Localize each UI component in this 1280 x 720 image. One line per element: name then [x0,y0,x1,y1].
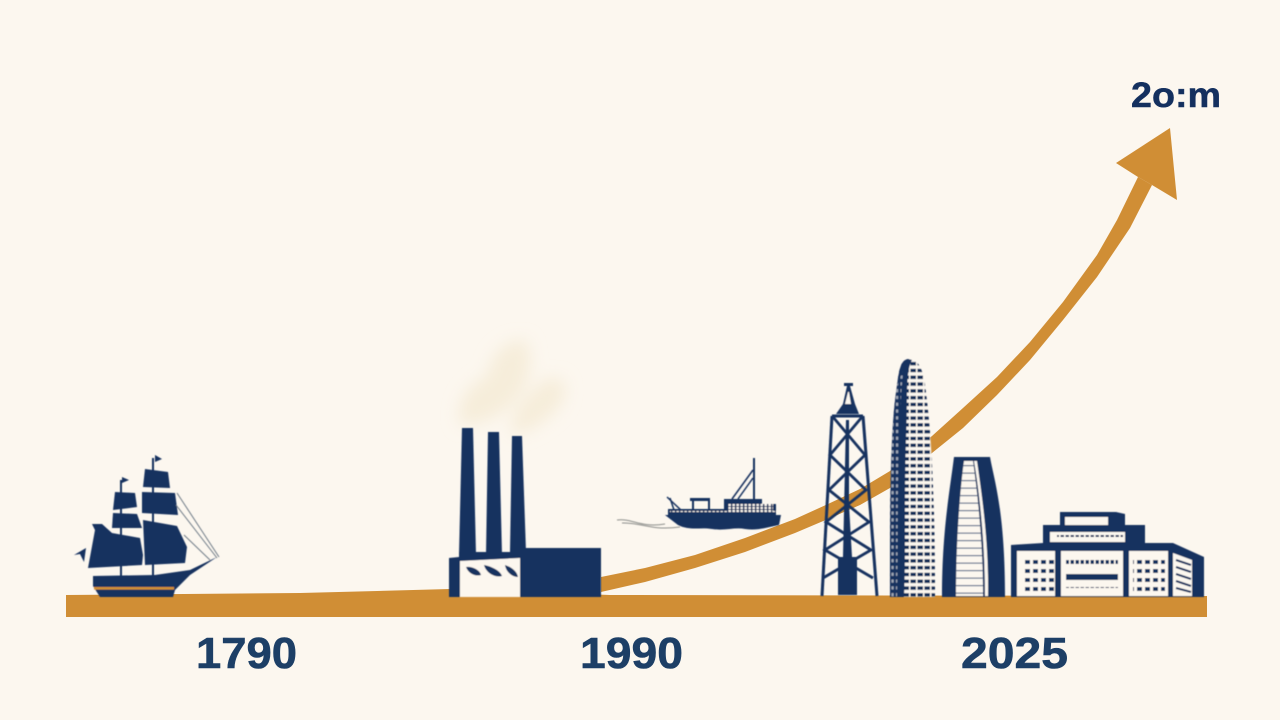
icon: tapered skyscraper [890,359,935,597]
icon: oil derrick [822,383,877,596]
label: arrow end value: 2o:m [1131,76,1221,115]
waves [617,520,680,528]
rising growth arrow [601,128,1177,592]
icon: modern cargo vessel [617,458,781,530]
icon: office building [1011,512,1204,597]
baseline timeline bar [66,589,1207,617]
year label: 1990: 1990 [580,629,683,678]
arrow head [1116,128,1177,200]
icon: smoke plumes [459,340,565,435]
icon: sailing ship [74,455,219,597]
icon: factory [449,428,601,597]
icon: curved tower [942,457,1005,597]
year label: 1790: 1790 [196,629,297,678]
year label: 2025: 2025 [961,629,1068,678]
